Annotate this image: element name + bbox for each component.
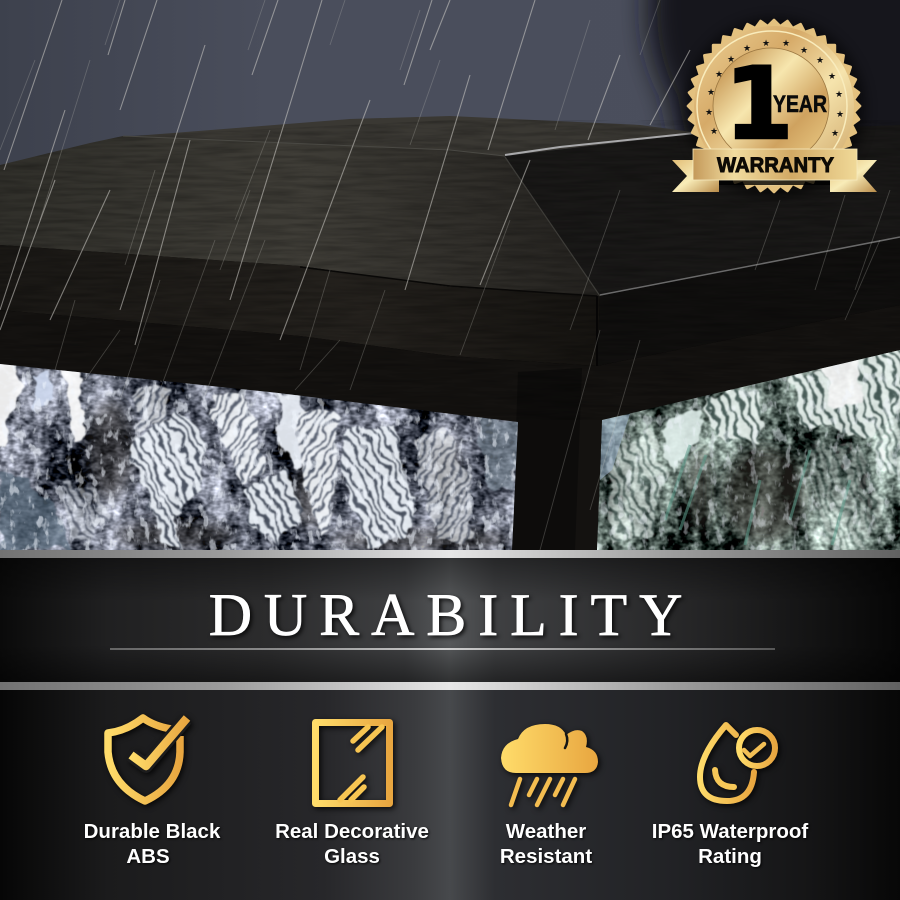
ring of stars: ★	[835, 90, 843, 100]
ring of stars: ★	[828, 72, 836, 82]
feature: weather resistant	[500, 724, 598, 868]
lantern roof cap	[123, 116, 700, 156]
label: Rating	[698, 845, 762, 868]
ring of stars: ★	[800, 46, 808, 56]
label: Weather	[506, 820, 586, 843]
rain streaks faint	[0, 0, 890, 550]
ribbon band	[693, 149, 857, 180]
blue-grey right shard	[475, 415, 518, 490]
icon: shield with check	[108, 718, 187, 801]
lantern corner post	[512, 368, 582, 550]
blue-grey lower left shard	[0, 470, 70, 550]
warranty seal badge	[672, 18, 877, 198]
serrated seal edge	[686, 18, 862, 194]
inner ring	[697, 31, 847, 181]
dark bays	[688, 447, 807, 543]
lantern roof band left	[0, 245, 600, 366]
ring of stars: ★	[836, 110, 844, 120]
rain streaks bright	[0, 0, 690, 345]
bright feathered leaves	[0, 360, 475, 550]
icon: rain cloud	[501, 724, 598, 805]
icon: water drop with check	[700, 725, 775, 801]
WARRANTY label: WARRANTY	[717, 154, 834, 177]
ring of stars: ★	[705, 108, 713, 118]
lantern roof band right	[597, 237, 900, 366]
feature: IP65 waterproof rating	[652, 725, 808, 868]
label: IP65 Waterproof	[652, 820, 808, 843]
top metal divider	[0, 550, 900, 558]
label: Glass	[324, 845, 380, 868]
blue corner tint	[600, 414, 630, 480]
streaked glass texture	[0, 360, 520, 550]
heading: DURABILITY: DURABILITY	[209, 582, 694, 648]
label: ABS	[126, 845, 170, 868]
label: Durable Black	[84, 820, 221, 843]
label: Resistant	[500, 845, 592, 868]
label: Real Decorative	[275, 820, 429, 843]
roof texture	[0, 120, 662, 326]
ring of stars: ★	[710, 127, 718, 137]
icon: glass pane	[316, 722, 390, 804]
left glass panel	[0, 360, 520, 552]
ring of stars: ★	[715, 70, 723, 80]
ribbon tails	[672, 160, 877, 192]
lower metal divider	[0, 682, 900, 690]
ring of stars: ★	[762, 39, 770, 49]
feature: durable black ABS	[84, 718, 221, 868]
cap highlight and hip lines	[123, 133, 900, 366]
lantern roof left face	[0, 136, 600, 296]
ring of stars: ★	[743, 44, 751, 54]
right glass panel	[595, 340, 900, 550]
inner gold disc	[712, 48, 830, 149]
title band	[0, 558, 900, 682]
sky	[0, 0, 900, 200]
dark bays	[86, 400, 510, 552]
lantern roof right face	[505, 125, 900, 296]
badge shadow	[685, 18, 865, 198]
seal body	[694, 26, 854, 186]
streaked glass texture	[595, 350, 900, 550]
YEAR label: YEAR	[773, 91, 827, 118]
ring of stars: ★	[727, 55, 735, 65]
dark tree silhouette	[648, 0, 900, 200]
ring of stars: ★	[707, 88, 715, 98]
ribbon fold shadows	[719, 180, 830, 185]
numeral 1: 1	[725, 47, 793, 162]
bright feathered leaves	[610, 340, 900, 548]
ring of stars: ★	[816, 56, 824, 66]
feature: real decorative glass	[275, 722, 429, 868]
glass sparkle	[595, 350, 900, 550]
title underline	[110, 648, 775, 650]
glass sparkle	[0, 360, 520, 550]
ring of stars: ★	[782, 39, 790, 49]
green streaks	[665, 445, 850, 545]
lantern frame	[0, 305, 900, 550]
ring of stars: ★	[831, 129, 839, 139]
panel: feature icons background	[0, 690, 900, 900]
photo: rain-soaked solar lantern	[0, 0, 900, 552]
